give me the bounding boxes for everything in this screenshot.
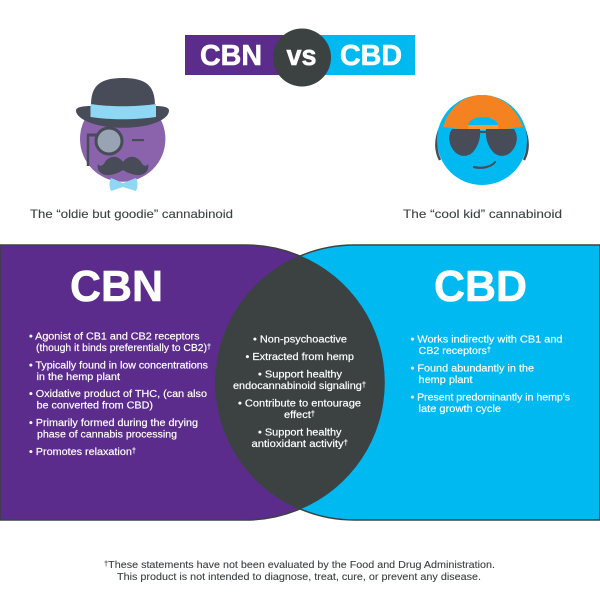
CBN bullet list: † [132, 448, 136, 455]
CBD bullet list: • Works indirectly with CB1 and [410, 334, 563, 346]
panel: shared properties [233, 334, 366, 450]
panel: CBD [410, 262, 570, 415]
caption: cool kid: The “cool kid” cannabinoid [403, 207, 562, 221]
CBN bullet list: • Typically found in low concentrations [29, 360, 208, 372]
panel: shared properties: • Support healthy [258, 370, 343, 380]
CBN bullet list: (though it binds preferentially to CB2) [36, 343, 204, 354]
CBN bullet list: • Primarily formed during the drying [29, 418, 198, 429]
CBN bullet list: phase of cannabis processing [37, 430, 177, 440]
panel: shared properties: • Support healthy [258, 428, 342, 438]
venn diagram background [0, 245, 600, 520]
panel: shared properties: • Non-psychoactive [253, 334, 347, 346]
CBN bullet list [29, 332, 211, 458]
icon: oldie character with hat and monocle [76, 78, 169, 191]
title banner: vs [286, 40, 316, 72]
title banner [185, 28, 415, 86]
panel: shared properties: antioxidant activity [252, 439, 335, 450]
footer disclaimer: These statements have not been evaluated by the Food and Drug Administration. [108, 560, 495, 571]
CBD bullet list: hemp plant [418, 375, 473, 386]
CBN bullet list: in the hemp plant [36, 372, 120, 383]
panel: shared properties: endocannabinoid signaling [233, 381, 354, 392]
panel: shared properties: • Contribute to entourage [238, 398, 361, 410]
heading: CBN: CBN [70, 262, 163, 311]
title banner: CBD [340, 40, 402, 72]
footer disclaimer [104, 560, 495, 583]
footer disclaimer: This product is not intended to diagnose, treat, cure, or prevent any disease. [117, 572, 481, 583]
CBD bullet list [410, 334, 570, 415]
CBD bullet list: † [487, 347, 491, 354]
panel: shared properties: † [311, 411, 315, 418]
CBN bullet list: • Promotes relaxation [29, 447, 126, 458]
panel: shared properties: • Extracted from hemp [246, 352, 354, 363]
icon: cool kid character with cap and sunglasses [436, 95, 528, 185]
panel: shared properties: effect [284, 410, 309, 421]
panel: shared properties: † [344, 440, 348, 447]
footer disclaimer: † [104, 561, 108, 568]
CBD bullet list: late growth cycle [418, 404, 501, 415]
CBD bullet list: CB2 receptors [418, 346, 484, 357]
caption: oldie but goodie: The “oldie but goodie” cannabinoid [30, 207, 233, 221]
CBN bullet list: † [207, 344, 211, 351]
CBN bullet list: • Agonist of CB1 and CB2 receptors [29, 332, 200, 342]
CBN bullet list: • Oxidative product of THC, (can also [29, 389, 207, 400]
panel: shared properties: † [362, 382, 366, 389]
CBD bullet list: • Found abundantly in the [410, 364, 534, 374]
CBN bullet list: be converted from CBD) [36, 400, 153, 412]
panel: CBN [29, 262, 211, 458]
title banner: CBN [200, 40, 262, 72]
CBD bullet list: • Present predominantly in hemp's [410, 392, 570, 404]
heading: CBD: CBD [434, 262, 527, 311]
